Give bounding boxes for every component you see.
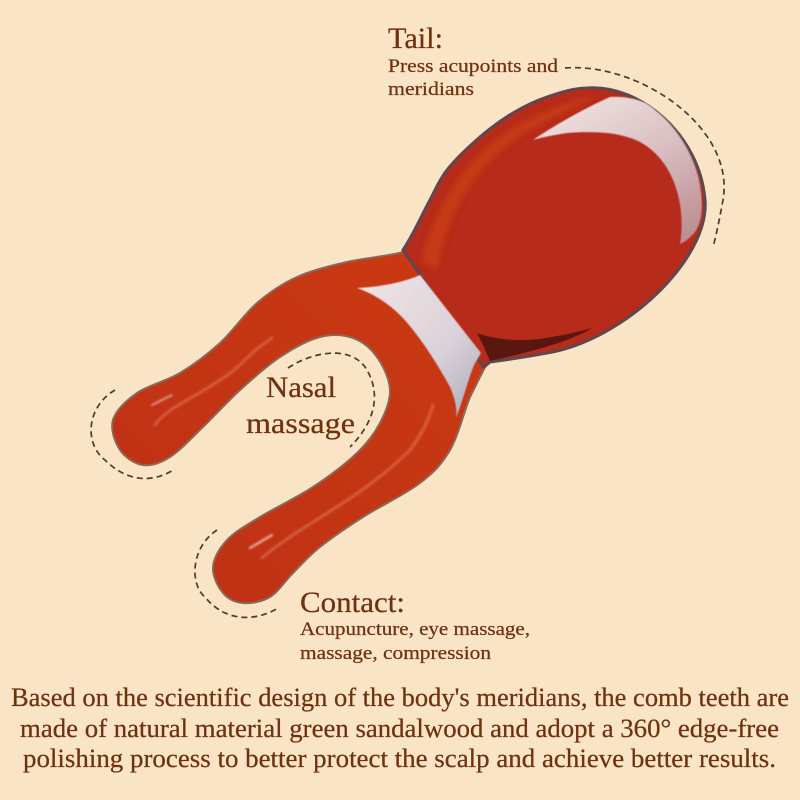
- label: contact: Acupuncture, eye massage,: [300, 619, 530, 640]
- label: tail: [388, 22, 559, 100]
- description paragraph: polishing process to better protect the scalp and achieve better results.: [23, 743, 776, 773]
- dashed arc: upper tip: [91, 390, 175, 479]
- bridge highlight: [357, 275, 481, 418]
- description paragraph: Based on the scientific design of the body's meridians, the comb teeth are: [11, 682, 789, 712]
- dashed arc: nasal: [288, 353, 374, 447]
- fork body: [112, 245, 500, 603]
- description paragraph: made of natural material green sandalwood and adopt a 360° edge-free: [20, 713, 779, 743]
- massage tool illustration: [112, 88, 705, 603]
- label: contact: Contact:: [300, 586, 405, 619]
- head bright highlight: [533, 97, 702, 244]
- head body: [403, 88, 705, 367]
- label: tail: Press acupoints and: [388, 56, 559, 77]
- label: nasal massage: massage: [246, 407, 355, 440]
- label: tail: meridians: [388, 79, 474, 100]
- head rim shadow: [477, 328, 592, 361]
- label: contact: [300, 586, 530, 664]
- label: contact: massage, compression: [300, 643, 492, 664]
- dashed arc: tail: [565, 68, 724, 247]
- fork streak highlights: [152, 338, 433, 558]
- label: nasal massage: Nasal: [266, 371, 336, 404]
- head orange edge: [421, 95, 600, 270]
- label: nasal massage: [246, 371, 355, 440]
- description paragraph: [11, 682, 789, 773]
- label: tail: Tail:: [388, 22, 443, 55]
- dashed arc: lower tip: [195, 530, 278, 617]
